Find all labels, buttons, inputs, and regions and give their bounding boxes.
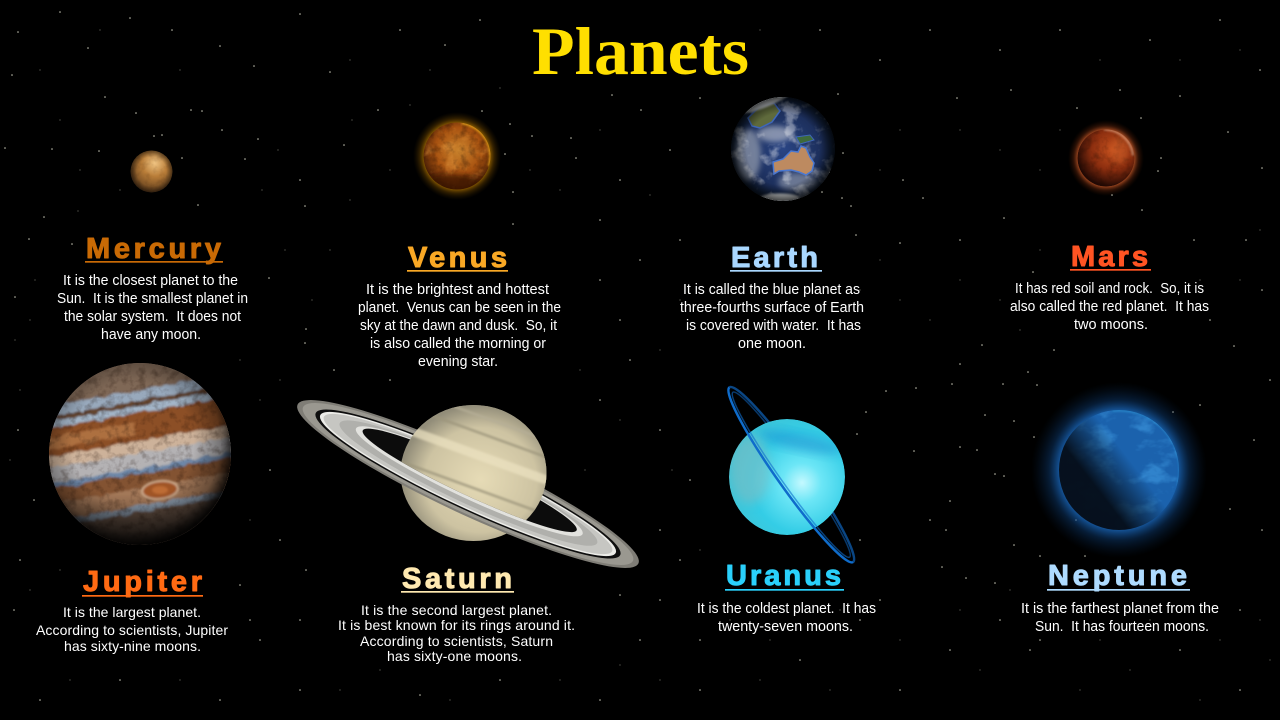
panel: Mars (1010, 120, 1209, 333)
text block: Jupiter description: It is the largest planet. (63, 604, 201, 620)
text block: Earth description (680, 282, 864, 352)
text block: Venus description: sky at the dawn and dusk. So, it (360, 318, 557, 334)
heading: Uranus: Uranus (726, 560, 841, 592)
heading: Venus: Venus (408, 242, 507, 274)
heading: Mercury: Mercury (86, 233, 221, 265)
text block: Mars description: two moons. (1074, 317, 1148, 333)
panel: Venus (358, 112, 561, 370)
panel: Earth (680, 84, 864, 352)
text block: Mercury description (57, 273, 248, 343)
text block: Earth description: It is called the blue planet as (683, 282, 860, 298)
heading: Jupiter: Jupiter (83, 566, 202, 598)
text block: Saturn description: has sixty-one moons. (387, 648, 522, 664)
icon: Mars planet (1068, 120, 1144, 196)
icon: Venus planet (413, 112, 501, 200)
text block: Mercury description: It is the closest planet to the (63, 273, 238, 289)
text block: Earth description: one moon. (738, 336, 806, 352)
icon: Saturn planet with rings (297, 400, 639, 568)
text block: Uranus description: twenty-seven moons. (718, 619, 853, 635)
text block: Neptune description (1021, 601, 1219, 635)
text block: Venus description (358, 282, 561, 370)
icon: Uranus planet with rings (727, 386, 856, 564)
heading: Mars: Mars (1071, 241, 1148, 273)
text block: Mars description (1010, 281, 1209, 333)
panel: Mercury (57, 150, 248, 343)
heading: Earth: Earth (731, 242, 818, 274)
panel: Saturn (297, 400, 639, 664)
text block: Uranus description (697, 601, 876, 635)
text block: Saturn description: It is the second largest planet. (361, 602, 552, 618)
text block: Venus description: is also called the morning or (370, 336, 546, 352)
text block: Venus description: It is the brightest and hottest (366, 282, 549, 298)
text block: Saturn description: It is best known for its rings around it. (338, 617, 575, 633)
text block: Mercury description: the solar system. It does not (64, 309, 241, 325)
heading: Neptune: Neptune (1048, 560, 1187, 592)
text block: Jupiter description: has sixty-nine moons. (64, 638, 201, 654)
text block: Jupiter description: According to scientists, Jupiter (36, 622, 228, 638)
text block: Earth description: is covered with water. It has (686, 318, 861, 334)
text block: Saturn description: According to scientists, Saturn (360, 633, 553, 649)
text block: Earth description: three-fourths surface of Earth (680, 300, 864, 316)
text block: Venus description: evening star. (418, 354, 498, 370)
text block: Saturn description (338, 602, 575, 664)
title: Planets (532, 13, 749, 89)
icon: Jupiter planet (49, 363, 231, 545)
text block: Mercury description: have any moon. (101, 327, 201, 343)
heading: Saturn: Saturn (402, 563, 512, 595)
panel: Jupiter (36, 363, 231, 654)
text block: Mercury description: Sun. It is the smallest planet in (57, 291, 248, 307)
text block: Uranus description: It is the coldest planet. It has (697, 601, 876, 617)
text block: Venus description: planet. Venus can be seen in the (358, 300, 561, 316)
icon: Neptune planet (1031, 382, 1207, 558)
icon: Mercury planet (130, 150, 173, 193)
icon: Earth planet (731, 97, 835, 201)
text block: Neptune description: It is the farthest planet from the (1021, 601, 1219, 617)
panel: Uranus (697, 379, 876, 635)
text block: Mars description: also called the red planet. It has (1010, 299, 1209, 315)
panel: Neptune (1021, 382, 1219, 635)
text block: Mars description: It has red soil and rock. So, it is (1015, 281, 1204, 297)
text block: Jupiter description (36, 604, 228, 654)
text block: Neptune description: Sun. It has fourteen moons. (1035, 619, 1209, 635)
